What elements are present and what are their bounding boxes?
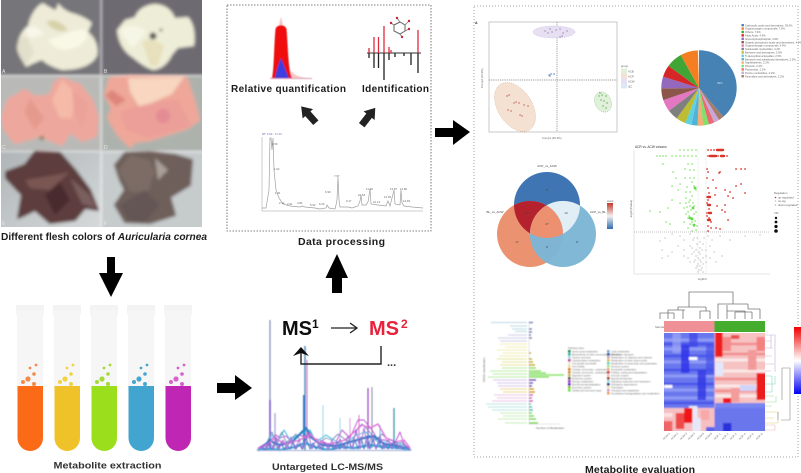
tube purple bbox=[164, 305, 192, 451]
KEGG legend: Endocrine system bbox=[572, 378, 592, 380]
chromatogram: 9.17 bbox=[346, 199, 352, 203]
PCA legend: ACB bbox=[628, 70, 634, 74]
tube orange bbox=[16, 305, 44, 451]
column sample labels: ACW-4 bbox=[687, 431, 696, 441]
row dendrogram bbox=[765, 335, 790, 430]
PCA scatter plot: A bbox=[475, 21, 478, 25]
heading: identification: Identification bbox=[362, 84, 429, 95]
column sample labels: ACW-6 bbox=[704, 431, 713, 441]
photo E: dark flesh bbox=[0, 152, 101, 232]
pie legend: Carboxylic acids and derivatives, 39.5% bbox=[745, 23, 793, 27]
Venn diagram: 29 bbox=[525, 211, 529, 215]
KEGG legend: Translation bbox=[611, 386, 624, 390]
photo C: pink flesh bbox=[0, 76, 101, 152]
pie legend: Pyrimidine and derivatives, 2.2% bbox=[745, 74, 785, 78]
pie legend: Organic phosphoric acids and derivatives, 4.9% bbox=[745, 40, 801, 44]
KEGG legend: Energy metabolism bbox=[572, 380, 593, 384]
column sample labels: ACW-5 bbox=[696, 431, 705, 441]
arrow: up to data processing bbox=[326, 254, 348, 293]
photo letters: A bbox=[2, 69, 6, 75]
heading: data processing: Data processing bbox=[298, 236, 385, 248]
photo letters: C bbox=[2, 145, 6, 151]
KEGG legend: Global and overview maps bbox=[572, 390, 602, 392]
column sample labels: ACP-4 bbox=[738, 432, 747, 441]
photo D: pink flesh bbox=[102, 76, 206, 152]
MS1 to MS2 label bbox=[282, 317, 408, 369]
volcano legend: no-sig bbox=[778, 199, 786, 203]
pie legend: Benzene and derivatives, 3.9% bbox=[745, 50, 783, 54]
MS1 to MS2 label: 2 bbox=[401, 317, 408, 331]
pie legend: Nucleoside nucleotides, 4.4% bbox=[745, 47, 781, 51]
volcano legend: Regulation bbox=[774, 191, 788, 195]
KEGG legend: Digestive system bbox=[572, 374, 591, 378]
chromatogram: RT: 0.00 - 17.01 bbox=[262, 132, 282, 136]
column sample labels: ACP-2 bbox=[721, 432, 730, 441]
pie legend: Organooxygen compounds, 7.6% bbox=[745, 27, 786, 31]
arrow: right to LC-MS bbox=[217, 375, 252, 400]
KEGG legend: Xenobiotics biodegradation and metabolism bbox=[611, 392, 660, 396]
chromatogram: 1.02 bbox=[274, 167, 280, 171]
pie legend: Purine nucleotides, 2.2% bbox=[745, 71, 775, 75]
chromatogram: 12.14 bbox=[373, 200, 380, 204]
column sample labels: ACP-1 bbox=[713, 432, 722, 441]
panel: mushroom photographs bbox=[0, 0, 206, 232]
PCA legend bbox=[621, 64, 635, 88]
KEGG legend: Metabolism of cofactors and vitamins bbox=[611, 356, 653, 360]
PCA legend: ACW bbox=[628, 80, 635, 84]
MS1 to MS2 label: ... bbox=[387, 357, 396, 369]
column sample labels bbox=[662, 431, 764, 441]
heading: untargeted LC-MS/MS: Untargeted LC-MS/MS bbox=[272, 462, 383, 472]
KEGG legend: Nucleotide metabolism bbox=[611, 368, 636, 372]
Venn diagram: 13 bbox=[564, 211, 568, 215]
column sample labels: ACP-5 bbox=[746, 432, 755, 441]
volcano legend: VIP bbox=[774, 211, 779, 215]
PCA legend: QC bbox=[628, 84, 632, 88]
heading: metabolite extraction: Metabolite extraction bbox=[54, 460, 162, 472]
overlaid traces bbox=[257, 320, 411, 450]
mirror spectrum: identification bbox=[367, 17, 421, 80]
KEGG legend: Transport and catabolism bbox=[611, 390, 639, 392]
pie chart: 39% bbox=[717, 81, 723, 85]
pie legend: Naphthalenes, 2.2% bbox=[745, 61, 770, 65]
KEGG legend: Environmental adaptation bbox=[572, 384, 601, 386]
pie legend: Glycerophospholipids, 4.9% bbox=[745, 37, 779, 41]
photo letters: B bbox=[104, 69, 108, 75]
KEGG legend: Lipid metabolism bbox=[611, 350, 630, 354]
chromatogram: 14.93 bbox=[403, 199, 410, 203]
column sample labels: ACW-1 bbox=[662, 431, 671, 441]
volcano legend: down-regulated bbox=[778, 203, 798, 207]
KEGG legend: Cellular community - eukaryotes bbox=[572, 368, 608, 372]
Venn diagram bbox=[486, 164, 614, 267]
pie legend: Phenols, 2.2% bbox=[745, 64, 763, 68]
heading: flesh colors: Different flesh colors of Auricularia cornea bbox=[1, 232, 207, 243]
arrow: down to extraction bbox=[99, 257, 123, 297]
chromatogram: 6.99 bbox=[325, 190, 331, 194]
PCA scatter plot bbox=[475, 21, 635, 140]
volcano legend: up-regulated bbox=[778, 196, 794, 200]
KEGG legend: Amino acid metabolism bbox=[572, 350, 598, 354]
photo letters: E bbox=[2, 221, 6, 227]
panel: LC-MS/MS chromatogram bbox=[257, 317, 411, 450]
panel: data processing bbox=[227, 5, 431, 231]
arrow: up-right bbox=[356, 104, 381, 129]
volcano plot bbox=[629, 145, 798, 281]
Venn colour scale: count bbox=[607, 199, 614, 203]
KEGG legend: Nervous system bbox=[611, 366, 629, 368]
KEGG legend: Cell motility bbox=[572, 366, 586, 368]
KEGG legend: Signaling molecules and interaction bbox=[611, 380, 651, 384]
photo letters: F bbox=[104, 221, 107, 227]
KEGG: pathway label strokes bbox=[486, 322, 527, 423]
KEGG legend: Cellular community - prokaryotes bbox=[572, 372, 609, 374]
KEGG legend: Excretory system bbox=[572, 386, 591, 390]
KEGG legend: Immune system bbox=[611, 374, 629, 378]
photo F: dark flesh bbox=[102, 152, 206, 232]
PCA scatter plot: Comp2 (23.3%) bbox=[480, 68, 484, 88]
KEGG legend: Metabolism of other amino acids bbox=[611, 360, 648, 362]
MS1 to MS2 label: MS bbox=[369, 318, 399, 340]
tube green bbox=[90, 305, 118, 451]
heatmap colour scale bbox=[794, 327, 801, 394]
pie legend: 5'-deoxyribonucleosides, 2.5% bbox=[745, 54, 782, 58]
chromatogram: 7.97 bbox=[334, 174, 340, 178]
chromatogram: 2.91 bbox=[287, 202, 293, 206]
pie legend: Organonitrogen compounds, 4.9% bbox=[745, 44, 787, 48]
KEGG legend: Carbohydrate metabolism bbox=[572, 360, 601, 362]
panel: metabolite extraction tubes bbox=[16, 305, 192, 451]
KEGG legend: Cell growth and death bbox=[572, 362, 597, 366]
KEGG legend: Membrane transport bbox=[611, 354, 634, 356]
chromatogram: 5.52 bbox=[310, 203, 316, 207]
chromatogram: 13.35 bbox=[384, 195, 391, 199]
volcano legend bbox=[774, 191, 798, 233]
pie chart bbox=[680, 23, 801, 107]
Venn diagram: 8 bbox=[546, 188, 548, 192]
chromatogram: 3.84 bbox=[297, 201, 303, 205]
column sample labels: ACP-6 bbox=[755, 432, 764, 441]
KEGG legend: Substance dependence bbox=[611, 384, 638, 386]
Venn diagram: ACP_vs_ACW bbox=[537, 164, 557, 168]
sample annotation bar bbox=[655, 321, 765, 332]
PCA scatter plot: Comp1 (25.4%) bbox=[542, 136, 562, 140]
KEGG legend: Pathway class bbox=[568, 347, 585, 350]
pie legend: Flavonoids, 2.2% bbox=[745, 68, 766, 72]
Venn diagram: 27 bbox=[545, 222, 549, 226]
chromatogram: 1.31 bbox=[275, 191, 281, 195]
PCA legend: ACP bbox=[628, 74, 634, 78]
PCA legend: group bbox=[621, 64, 629, 68]
pie legend: Fatty Acyls, 4.9% bbox=[745, 34, 766, 38]
heatmap with dendrograms bbox=[655, 292, 801, 441]
tube blue bbox=[127, 305, 155, 451]
KEGG legend: Signal transduction bbox=[611, 378, 633, 380]
Venn diagram: BL_vs_ACW bbox=[486, 210, 504, 214]
KEGG legend: Biosynthesis of other secondary metabolites bbox=[572, 354, 622, 356]
Venn diagram: 17 bbox=[515, 240, 519, 244]
column sample labels: ACP-3 bbox=[729, 432, 738, 441]
chromatogram: 6.26 bbox=[319, 202, 325, 206]
volcano plot: log2FC bbox=[698, 277, 707, 281]
chromatogram: 0.59 bbox=[272, 142, 278, 146]
KEGG legend: Metabolism of terpenoids and polyketides bbox=[611, 362, 658, 366]
volcano plot: ACR vs. ACW volcano bbox=[635, 145, 667, 149]
chromatogram: 11.48 bbox=[366, 187, 373, 191]
sample annotation bar: Sample bbox=[655, 325, 665, 329]
chromatogram: 14.80 bbox=[400, 187, 407, 191]
heatmap cells bbox=[664, 333, 765, 431]
photo A: white flesh bbox=[0, 0, 101, 76]
heading: relative quantification: Relative quantification bbox=[231, 84, 346, 95]
KEGG pathway chart: Number of Metabolites bbox=[536, 426, 565, 430]
column sample labels: ACW-3 bbox=[679, 431, 688, 441]
Venn diagram: 8 bbox=[546, 245, 548, 249]
photo B: white flesh bbox=[102, 0, 206, 76]
volcano: red points bbox=[707, 150, 745, 231]
KEGG pathway chart bbox=[482, 322, 660, 430]
column dendrogram bbox=[660, 292, 760, 319]
chromatogram: 10.54 bbox=[358, 193, 365, 197]
panel: metabolite evaluation bbox=[474, 6, 801, 457]
arrow: right to evaluation bbox=[435, 120, 470, 145]
photo letters: D bbox=[104, 145, 108, 151]
molecule bbox=[390, 17, 410, 38]
KEGG legend: Cancer overview bbox=[572, 356, 591, 360]
volcano: grey points bbox=[660, 234, 760, 272]
photo letters bbox=[2, 69, 108, 227]
KEGG legend: Folding, sorting and degradation bbox=[611, 372, 647, 374]
KEGG pathway chart: KEGG classification bbox=[482, 357, 486, 382]
MS1 to MS2 label: MS bbox=[282, 318, 312, 340]
volcano plot: -log10(Pvalue) bbox=[629, 200, 633, 218]
pie legend: Benzene and substituted derivatives, 2.5% bbox=[745, 57, 796, 61]
Venn diagram: 8 bbox=[576, 240, 578, 244]
KEGG legend bbox=[568, 347, 660, 396]
chromatogram: 13.87 bbox=[390, 187, 397, 191]
peak plot: relative quantification bbox=[270, 17, 312, 78]
KEGG: bars bbox=[529, 322, 564, 423]
tube yellow bbox=[53, 305, 81, 451]
volcano: green points bbox=[650, 150, 697, 231]
Venn diagram: ACP_vs_BL bbox=[590, 210, 606, 214]
pie legend: Others, 7.0% bbox=[745, 30, 761, 34]
arrow: up-left bbox=[296, 102, 321, 127]
MS1 to MS2 label: 1 bbox=[312, 317, 319, 331]
pie legend bbox=[742, 23, 801, 78]
column sample labels: ACW-2 bbox=[670, 431, 679, 441]
chromatogram: 2.14 bbox=[279, 201, 285, 205]
chromatogram bbox=[262, 132, 423, 211]
